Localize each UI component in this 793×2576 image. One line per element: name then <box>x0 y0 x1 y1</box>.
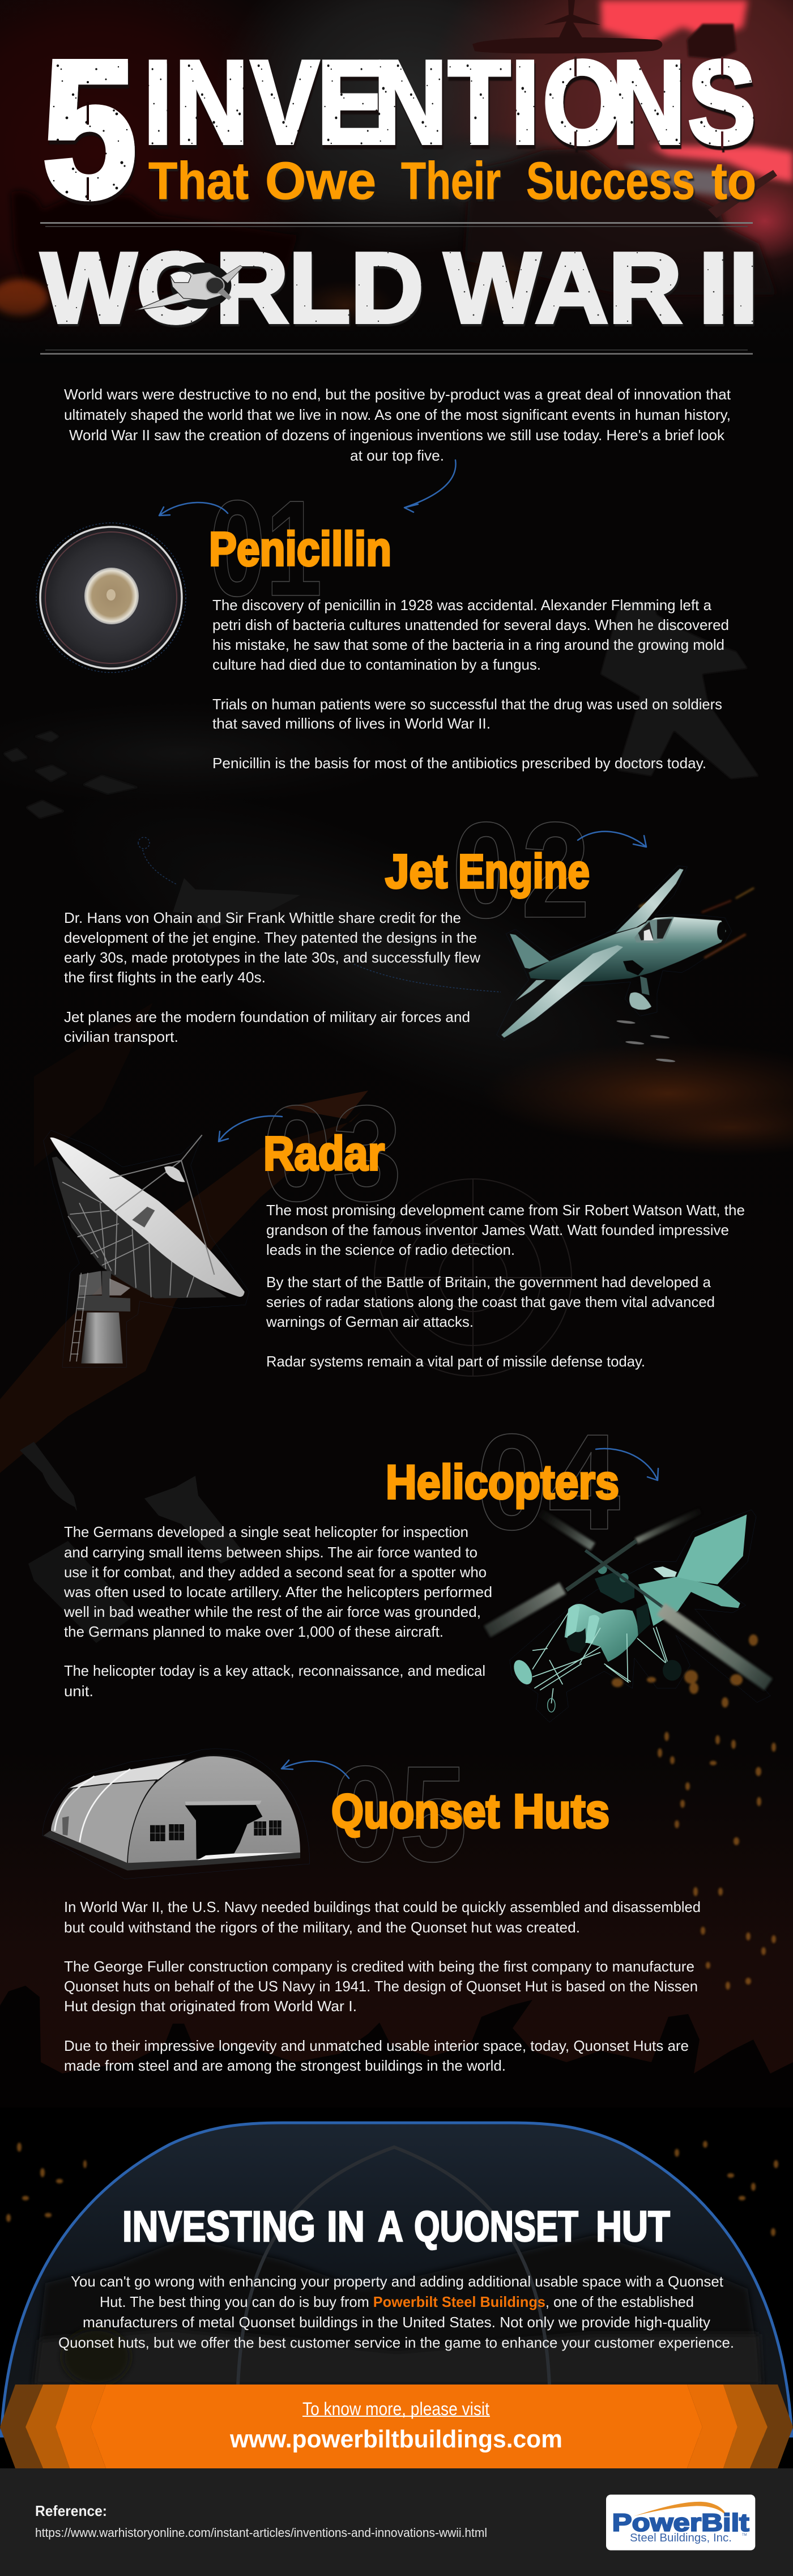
fire at lower left <box>0 279 48 316</box>
section 01: text: petri dish of bacteria cultures unattended for several days. When he discovered <box>212 616 729 633</box>
section 03: text: The most promising development came from Sir Robert Watson Watt, the <box>266 1202 745 1219</box>
section 04: text: The Germans developed a single seat helicopter for inspection <box>64 1523 468 1540</box>
section 02: text: early 30s, made prototypes in the late 30s, and successfully flew <box>64 949 480 966</box>
icon: helicopter <box>487 1510 770 1722</box>
section 03: number: 03 <box>262 1078 402 1230</box>
panel: investing arch <box>1 2123 792 2436</box>
logo: PowerBilt: TM <box>742 2534 747 2537</box>
section 04: text <box>63 1523 492 1700</box>
call-to-action ribbon <box>0 2385 793 2468</box>
section 04: text: and carrying small items between ships. The air force wanted to <box>64 1544 477 1561</box>
section 04: text: was often used to locate artillery. After the helicopters performed <box>63 1583 492 1600</box>
arrow: section 04 <box>596 1449 658 1480</box>
orange swoosh band <box>0 1110 363 1473</box>
section 05: heading <box>331 1785 609 1838</box>
header battle scene background <box>0 0 793 363</box>
soldier silhouettes at left <box>11 191 300 295</box>
subtitle: That Owe Their Success to: That <box>148 151 249 210</box>
rule above World War II <box>40 222 753 227</box>
intro text: World War II saw the creation of dozens of ingenious inventions we still use today. Here's a brief look <box>69 427 725 444</box>
section 05: text: Quonset huts on behalf of the US Navy in 1941. The design of Quonset Hut is based on the Nissen <box>64 1978 698 1995</box>
heading: investing in a quonset hut: QUONSET <box>414 2203 578 2251</box>
heading: investing in a quonset hut: HUT <box>596 2203 670 2251</box>
section 02: text <box>64 909 480 1045</box>
logo: PowerBilt: Steel Buildings, Inc. <box>630 2531 732 2544</box>
section 02: text: civilian transport. <box>64 1028 178 1045</box>
section 04: text: well in bad weather while the rest of the air force was grounded, <box>63 1603 481 1620</box>
section 04: heading: Helicopters <box>386 1455 619 1509</box>
section 05: text: but could withstand the rigors of the military, and the Quonset hut was created. <box>64 1919 580 1936</box>
icon: fighter plane on the O <box>135 262 243 310</box>
section 02: text: development of the jet engine. They patented the designs in the <box>64 929 477 946</box>
section 03: text <box>266 1202 745 1370</box>
title: 5 Inventions: INVENTIONS <box>144 37 756 169</box>
logo: PowerBilt: PowerBilt <box>612 2509 749 2536</box>
section 05: heading: Quonset <box>331 1785 500 1838</box>
section 03: text: warnings of German air attacks. <box>266 1313 474 1330</box>
small plane formation <box>3 731 139 819</box>
section 04: text: use it for combat, and they added a second seat for a spotter who <box>64 1564 487 1581</box>
title: 5 Inventions: 5 <box>42 20 137 239</box>
section 01: text: his mistake, he saw that some of the bacteria in a ring around the growing mold <box>212 636 724 653</box>
section 04: text: unit. <box>64 1683 93 1700</box>
section 01: text: The discovery of penicillin in 1928 was accidental. Alexander Flemming left a <box>212 597 712 614</box>
section 02: text: the first flights in the early 40s. <box>64 969 266 986</box>
section 05: number: 05 <box>331 1738 467 1891</box>
section 02: number: 02 <box>451 794 590 947</box>
subtitle: That Owe Their Success to <box>148 151 756 210</box>
section 02: text: Dr. Hans von Ohain and Sir Frank Whittle share credit for the <box>64 909 461 926</box>
smoke plume <box>687 24 736 59</box>
plane silhouette in sky <box>472 0 662 53</box>
section 01: text: Penicillin is the basis for most of the antibiotics prescribed by doctors today. <box>212 755 706 772</box>
investing text <box>58 2273 734 2351</box>
icon: radar dish <box>44 1130 249 1367</box>
website: www.powerbiltbuildings.com <box>229 2425 562 2453</box>
section 05: heading: Huts <box>513 1785 609 1838</box>
link prompt: To know more, please visit <box>302 2399 489 2419</box>
section 03: text: Radar systems remain a vital part of missile defense today. <box>266 1353 645 1370</box>
icon: quonset hut <box>42 1749 310 1879</box>
section 01: text: Trials on human patients were so successful that the drug was used on soldiers <box>212 696 722 713</box>
section 05: text: Due to their impressive longevity and unmatched usable interior space, today, Quonset Huts are <box>64 2037 689 2054</box>
arrow: section 05 <box>282 1760 349 1778</box>
arrow: section 01 <box>159 503 228 516</box>
icon: petri dish <box>36 523 186 672</box>
section 03: text: By the start of the Battle of Britain, the government had developed a <box>266 1274 711 1291</box>
subtitle: That Owe Their Success to: to <box>711 151 756 210</box>
soldier background silhouette <box>600 601 759 779</box>
section 02: text: Jet planes are the modern foundation of military air forces and <box>64 1008 470 1025</box>
heading: investing in a quonset hut: INVESTING <box>122 2203 316 2251</box>
investing text: Quonset huts, but we offer the best customer service in the game to enhance your customer experience. <box>58 2334 734 2351</box>
section 05: text: Hut design that originated from World War I. <box>64 1998 357 2015</box>
section 01: text: that saved millions of lives in World War II. <box>212 715 491 732</box>
title: World War II: WORLD <box>41 232 424 344</box>
heading: investing in a quonset hut: A <box>378 2203 403 2251</box>
section 01: heading: Penicillin <box>209 522 391 576</box>
subtitle: That Owe Their Success to: Their <box>401 151 501 210</box>
soldier silhouettes near hut section <box>0 1986 793 2107</box>
arrow: section 02 <box>578 832 646 847</box>
reference heading: Reference: <box>35 2502 107 2519</box>
intro text: ultimately shaped the world that we live in now. As one of the most significant events in human history, <box>64 406 731 423</box>
logo: PowerBilt <box>606 2494 755 2551</box>
intro text: at our top five. <box>350 447 444 464</box>
section 02: heading: Jet <box>385 845 447 898</box>
title: World War II: WAR <box>444 232 682 344</box>
title: 5 Inventions <box>42 20 756 239</box>
rule below World War II <box>40 350 753 355</box>
radar scope rings <box>374 1179 572 1376</box>
section 01: text: culture had died due to contamination by a fungus. <box>212 656 541 673</box>
title: World War II <box>41 232 758 344</box>
plane background silhouette <box>173 878 300 929</box>
heading: investing in a quonset hut: IN <box>327 2203 365 2251</box>
section 03: text: series of radar stations along the coast that gave them vital advanced <box>266 1293 715 1310</box>
section 04: text: the Germans planned to make over 1,000 of these aircraft. <box>64 1623 444 1640</box>
section 05: text <box>64 1898 701 2074</box>
section 01: number: 01 <box>209 472 322 625</box>
bomb silhouettes <box>20 1442 244 1643</box>
arrow: section 03 <box>219 1116 282 1142</box>
section 03: text: leads in the science of radio detection. <box>266 1241 515 1258</box>
embers <box>6 1634 778 2236</box>
section 05: text: made from steel and are among the strongest buildings in the world. <box>64 2057 506 2074</box>
section 04: text: The helicopter today is a key attack, reconnaissance, and medical <box>64 1662 485 1679</box>
section 05: text: In World War II, the U.S. Navy needed buildings that could be quickly assembled and disassembled <box>64 1898 701 1915</box>
investing text: Hut. The best thing you can do is buy from Powerbilt Steel Buildings, one of the established <box>100 2293 694 2310</box>
section 05: text: The George Fuller construction company is credited with being the first company to manufacture <box>64 1958 694 1975</box>
section 04: number: 04 <box>476 1406 620 1559</box>
section 02: heading: Engine <box>458 845 590 898</box>
section 03: text: grandson of the famous inventor James Watt. Watt founded impressive <box>266 1221 729 1238</box>
investing text: You can't go wrong with enhancing your property and adding additional usable space with a Quonset <box>71 2273 724 2290</box>
title: World War II: II <box>698 232 758 344</box>
arrow: intro to penicillin <box>404 460 456 512</box>
intro text: World wars were destructive to no end, but the positive by-product was a great deal of innovation that <box>64 386 731 403</box>
icon: jet plane <box>497 866 732 1063</box>
mid page background textures <box>0 601 793 2236</box>
section 02: heading <box>385 845 590 898</box>
section 03: heading: Radar <box>263 1127 385 1180</box>
subtitle: That Owe Their Success to: Success <box>526 151 695 210</box>
heading: investing in a quonset hut <box>122 2203 670 2251</box>
footer background <box>0 2468 793 2576</box>
tank silhouette <box>464 148 776 295</box>
reference url: https://www.warhistoryonline.com/instant-articles/inventions-and-innovations-wwii.html <box>35 2526 487 2540</box>
investing text: manufacturers of metal Quonset buildings in the United States. Not only we provide high-quality <box>83 2314 710 2331</box>
intro text <box>64 386 731 464</box>
streak lights <box>640 888 753 957</box>
section 01: text <box>212 597 729 772</box>
subtitle: That Owe Their Success to: Owe <box>265 151 376 210</box>
